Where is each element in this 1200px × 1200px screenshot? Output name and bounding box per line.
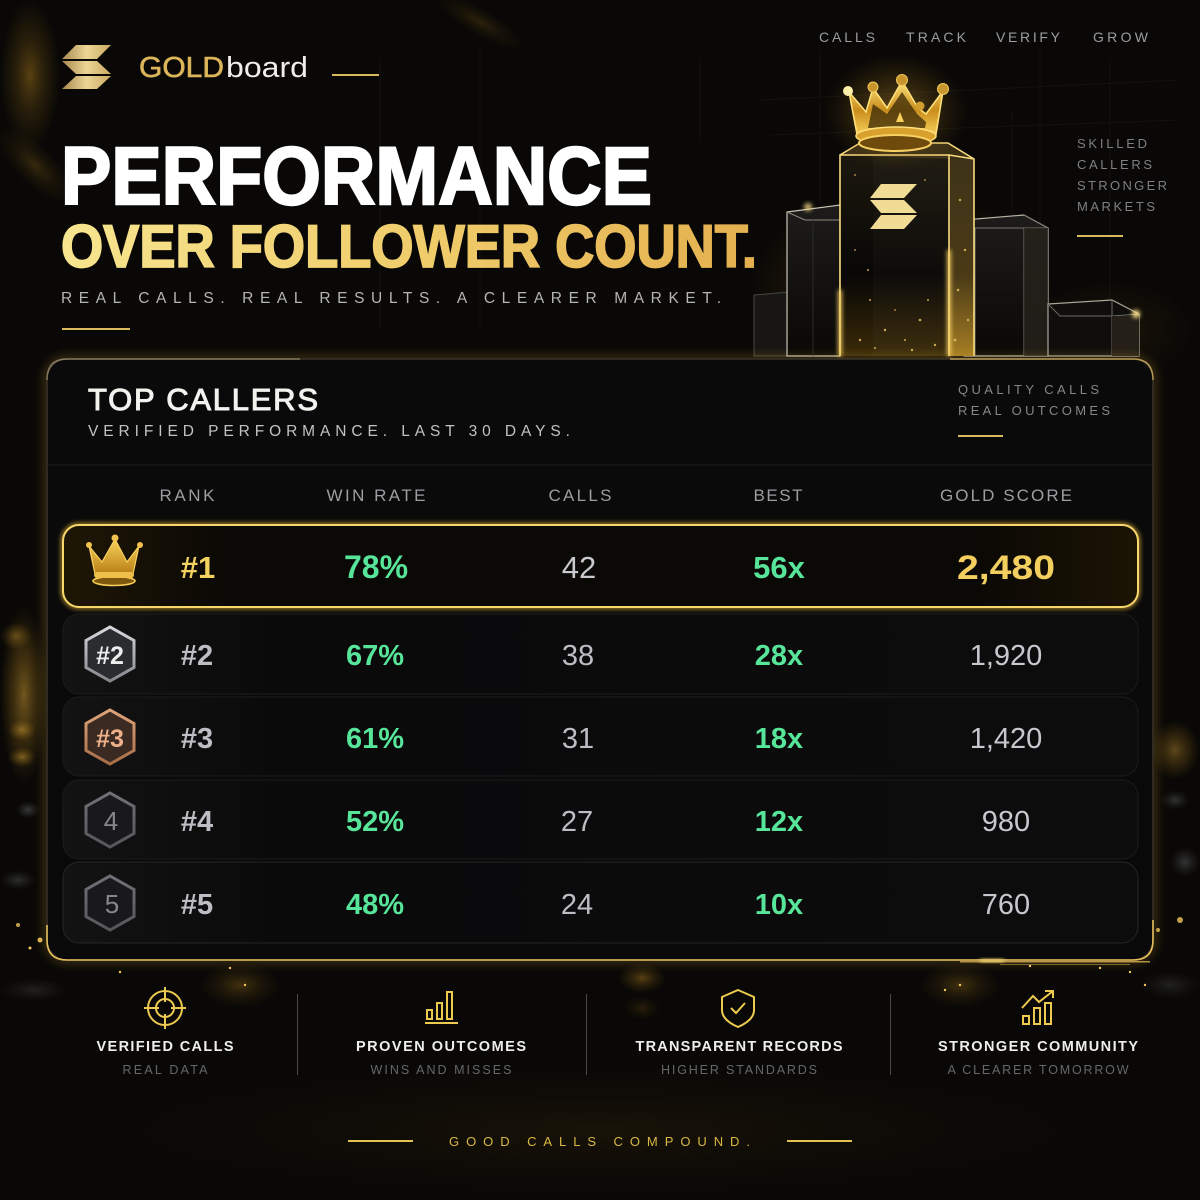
low right glass block: [1048, 300, 1140, 356]
table column headers: WIN RATE: [326, 486, 426, 505]
tagline: REAL CALLS. REAL RESULTS. A CLEARER MARKET.: [61, 290, 721, 307]
side note: SKILLED: [1077, 136, 1147, 151]
row 1: 78%: [344, 549, 408, 585]
icon: shield check: [722, 990, 754, 1027]
headline: OVER FOLLOWER COUNT.: [61, 213, 757, 280]
top navigation: TRACK: [906, 29, 967, 45]
row 4: 12x: [755, 806, 803, 838]
row 2: #2: [181, 640, 213, 672]
block logo: [870, 184, 917, 229]
panel note: [958, 382, 1110, 437]
main leaderboard panel: [47, 359, 1153, 960]
top navigation: GROW: [1093, 29, 1149, 45]
top navigation: CALLS: [819, 29, 875, 45]
row 1: 2,480: [957, 549, 1055, 587]
right glass block: [964, 215, 1048, 356]
feature: proven outcomes: WINS AND MISSES: [370, 1063, 512, 1077]
row 3: 1,420: [970, 723, 1042, 755]
side note: STRONGER: [1077, 178, 1167, 193]
row 4: 52%: [346, 806, 404, 838]
panel glow and body: [47, 359, 1153, 960]
feature: verified calls: [96, 987, 234, 1077]
brand logo: [62, 45, 111, 89]
brand wordmark: GOLD: [139, 52, 224, 84]
row 5: #5: [181, 889, 213, 921]
row 1: 42: [562, 550, 596, 585]
row 5: 760: [982, 889, 1030, 921]
icon: bar chart: [425, 992, 458, 1023]
row 5: 10x: [755, 889, 803, 921]
feature: verified calls: VERIFIED CALLS: [96, 1039, 234, 1055]
row 5: [63, 862, 1138, 943]
feature: transparent records: [636, 990, 843, 1077]
feature: stronger community: [938, 991, 1138, 1077]
icon: target: [144, 987, 186, 1029]
left glass block: [787, 203, 840, 356]
feature: transparent records: TRANSPARENT RECORDS: [636, 1039, 843, 1055]
feature: verified calls: REAL DATA: [122, 1063, 208, 1077]
far left glass block: [754, 292, 790, 356]
headline: PERFORMANCE: [61, 131, 652, 222]
side note: CALLERS: [1077, 157, 1152, 172]
row 3: #3: [181, 723, 213, 755]
row 5: 48%: [346, 889, 404, 921]
row 3: 61%: [346, 723, 404, 755]
table column headers: CALLS: [548, 486, 612, 505]
icon: gold crown: [86, 534, 143, 586]
badge: hexagon 4: [86, 793, 134, 847]
icon: growth chart: [1022, 991, 1053, 1024]
table column headers: BEST: [754, 486, 802, 505]
large crown: [824, 54, 968, 170]
badge: hexagon 4: 4: [104, 806, 118, 836]
table column headers: GOLD SCORE: [940, 486, 1072, 505]
row 4: [63, 780, 1138, 859]
panel note: REAL OUTCOMES: [958, 403, 1110, 418]
badge: bronze hexagon: #3: [96, 725, 124, 753]
row 3: 18x: [755, 723, 803, 755]
row 5: 24: [561, 889, 593, 921]
feature: stronger community: A CLEARER TOMORROW: [948, 1063, 1129, 1077]
table column headers: RANK: [160, 486, 215, 505]
badge: hexagon 5: 5: [105, 889, 119, 919]
feature: stronger community: STRONGER COMMUNITY: [938, 1039, 1138, 1055]
row 2: 67%: [346, 640, 404, 672]
row 1: [63, 525, 1138, 607]
row 2: 28x: [755, 640, 803, 672]
brand wordmark: board: [226, 52, 308, 84]
feature: transparent records: HIGHER STANDARDS: [661, 1063, 817, 1077]
main gold glass block: [840, 143, 974, 356]
panel heading: TOP CALLERS: [88, 382, 318, 417]
feature: proven outcomes: [356, 992, 526, 1077]
badge: bronze hexagon: [86, 710, 134, 764]
row 3: [63, 697, 1138, 776]
badge: silver hexagon: #2: [96, 642, 124, 670]
gold speckles under the panel: [16, 917, 1183, 991]
feature: proven outcomes: PROVEN OUTCOMES: [356, 1039, 526, 1055]
headline: [61, 131, 757, 280]
side note: [1077, 136, 1167, 237]
row 3: 31: [562, 723, 594, 755]
row 2: 38: [562, 640, 594, 672]
panel note: QUALITY CALLS: [958, 382, 1099, 397]
footer tagline: GOOD CALLS COMPOUND.: [449, 1134, 750, 1149]
badge: silver hexagon: [86, 627, 134, 681]
row 4: 980: [982, 806, 1030, 838]
row 1: #1: [181, 550, 215, 585]
panel heading: VERIFIED PERFORMANCE. LAST 30 DAYS.: [88, 423, 570, 440]
badge: hexagon 5: [86, 876, 134, 930]
row 4: 27: [561, 806, 593, 838]
row 4: #4: [181, 806, 213, 838]
trophy podium illustration: [754, 54, 1140, 356]
row 2: 1,920: [970, 640, 1042, 672]
top navigation: [819, 29, 1149, 45]
top navigation: VERIFY: [996, 29, 1061, 45]
row 2: [63, 614, 1138, 694]
side note: MARKETS: [1077, 199, 1155, 214]
panel heading: [88, 382, 570, 440]
table column headers: [160, 486, 1072, 505]
brand wordmark: [139, 52, 379, 84]
row 1: 56x: [753, 550, 806, 585]
